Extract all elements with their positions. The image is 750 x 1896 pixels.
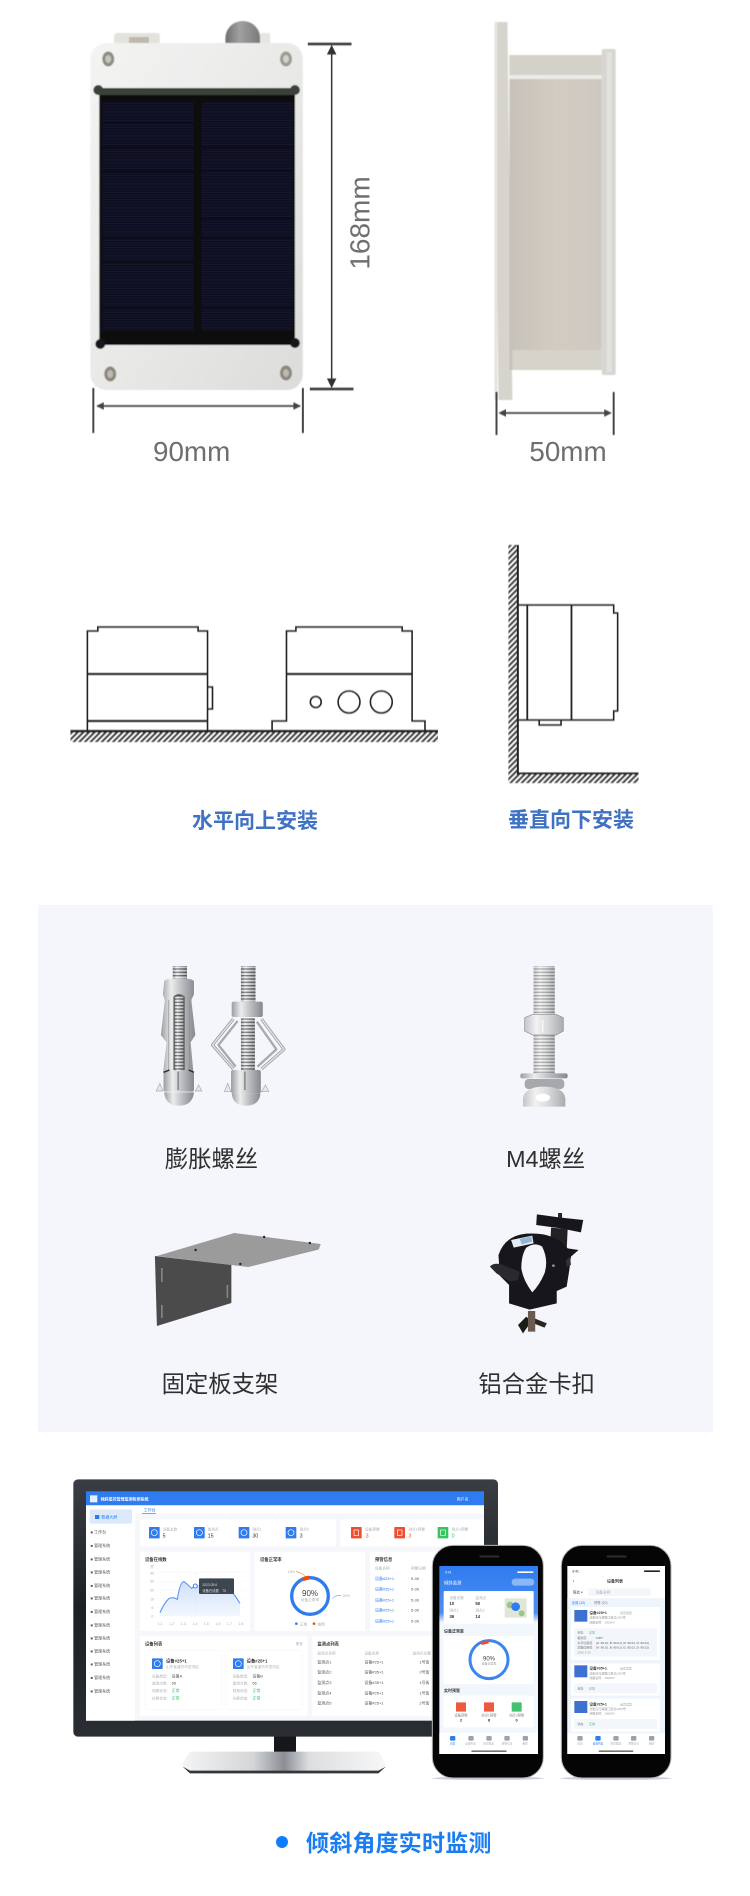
device list: 位移状态:: [233, 1695, 248, 1700]
device card 2: [571, 1663, 660, 1696]
stat card: 测点1: [449, 1608, 459, 1613]
stat strip: devices: 3: [300, 1534, 303, 1540]
tab bar: [567, 1733, 665, 1754]
dashboard sidebar: ■ 管理系统: [91, 1621, 110, 1627]
monitor screen: [86, 1492, 484, 1721]
tab bar: 我的: [649, 1742, 655, 1746]
height dimension arrow: [308, 44, 354, 389]
device card 2: 设备#35+1: [589, 1666, 607, 1671]
tab: [135, 1505, 484, 1514]
phone mockups: [432, 1545, 672, 1780]
donut chart: device normal rate: 90%: [343, 1594, 351, 1598]
desktop monitor dashboard mockup: [73, 1479, 498, 1773]
monitoring point list: 设备#35+1: [364, 1669, 384, 1675]
stat card: [444, 1591, 534, 1624]
dashboard sidebar: ■ 管理系统: [91, 1687, 110, 1693]
line chart: devices online: 1.4: [192, 1622, 197, 1626]
donut chart: device normal rate: 设备正常率: [301, 1597, 319, 1602]
donut chart: device normal rate: [255, 1552, 365, 1631]
stat strip: alarms: 测点1预警: [408, 1527, 425, 1532]
label: expansion bolts: 膨胀螺丝: [165, 1146, 258, 1172]
monitoring point list: 2号街: [419, 1669, 430, 1675]
dashboard sidebar: ■ 管理系统: [91, 1661, 110, 1667]
width label: 90mm: [153, 436, 230, 467]
alarm card: [444, 1696, 534, 1727]
line chart: devices online: 10: [150, 1597, 154, 1601]
device card 1: (A: 90.01, B: 90.01) (C: 90.01, D: 90.01): [596, 1641, 649, 1645]
alarm info list: 设备#25+1: [375, 1596, 395, 1602]
line chart: devices online: 30: [150, 1580, 154, 1584]
phone 2 screen: 9:41: [572, 1570, 579, 1574]
phone 1 screen: 9:41: [445, 1570, 452, 1574]
device card 1: 运营类型: [620, 1610, 632, 1615]
device card 3: 运营类型: [620, 1701, 632, 1706]
stat strip: alarms: 3: [408, 1534, 411, 1540]
device card 2: 正常: [589, 1685, 595, 1690]
stat card: 36: [449, 1614, 455, 1619]
device card 1: 高程位移值:: [577, 1645, 593, 1650]
monitoring point list: 设备#25+1: [364, 1700, 384, 1706]
width dimension arrow: [93, 388, 303, 433]
device list: 设备B: [252, 1672, 263, 1678]
device card 1: 相对值:: [577, 1635, 587, 1640]
tab bar: 首页: [577, 1742, 583, 1746]
line chart: devices online: [140, 1552, 250, 1631]
dashboard sidebar: ■ 管理系统: [91, 1582, 110, 1588]
dashboard header: [86, 1492, 484, 1505]
device list: 设备#25+1: [247, 1657, 268, 1664]
device card 3: 滨和任元湖路口西北1203号: [589, 1706, 626, 1711]
monitor bezel: [73, 1479, 498, 1737]
monitoring point list: 1号街: [419, 1658, 430, 1664]
device list: 正常: [252, 1694, 260, 1700]
monitoring point list: [312, 1636, 484, 1716]
stat card: 10: [449, 1601, 455, 1606]
icon: aluminum alloy clamp: [490, 1213, 583, 1333]
stat strip: alarms: 3: [366, 1534, 369, 1540]
donut card: 设备正常率: [482, 1661, 496, 1666]
device list: 正常: [252, 1687, 260, 1693]
device card 2: 运营类型: [620, 1666, 632, 1671]
alarm info list: 设备#25+1: [375, 1607, 395, 1613]
dashboard sidebar: ■ 管理系统: [91, 1674, 110, 1680]
alarm card: 测点1预警: [481, 1712, 497, 1717]
phone 2 screen: 设备名称: [596, 1590, 611, 1595]
alarm card: 2: [460, 1718, 463, 1723]
line chart: devices online: 1.8: [238, 1622, 243, 1626]
dashboard sidebar: ■ 管理系统: [91, 1555, 110, 1561]
tab bar: 首页: [450, 1742, 456, 1746]
donut chart: device normal rate: 90%: [302, 1589, 318, 1598]
stat strip: alarms: 测点1预警: [452, 1527, 469, 1532]
device card 1: 2020.5.30: [577, 1651, 591, 1655]
alarm info list: 5-30: [411, 1587, 420, 1592]
dashboard sidebar: ■ 管理系统: [91, 1608, 110, 1614]
tab bar: [439, 1733, 538, 1754]
device card 1: (A: 90.01, B: 90.01) (C: 95.01, D: 95.01): [596, 1646, 649, 1650]
device card 1: 线路名称：1000KV: [589, 1619, 615, 1624]
product front view with dimensions: [90, 21, 375, 467]
device card 3: 正常: [589, 1721, 595, 1726]
label: horizontal installation: 水平向上安装: [192, 810, 318, 833]
line chart: devices online: 设备在线数: [145, 1556, 167, 1563]
stat strip: devices: [140, 1519, 336, 1547]
dashboard sidebar: ■ 管理系统: [91, 1595, 110, 1601]
alarm card: 设备预警: [454, 1712, 468, 1717]
alarm card: 测点2预警: [509, 1712, 525, 1717]
device list: 设备列表: [145, 1640, 163, 1647]
opened anchor: [212, 966, 284, 1106]
alarm info list: [370, 1552, 484, 1631]
box: end elevation with cable ports: [272, 627, 425, 731]
device list: 倾角状态:: [233, 1688, 248, 1693]
device card 1: 水平位移值:: [577, 1640, 593, 1645]
device list: 位移状态:: [152, 1695, 168, 1700]
donut chart: device normal rate: 设备正常率: [260, 1556, 282, 1563]
depth label: 50mm: [529, 436, 607, 467]
wall and floor: [508, 545, 638, 783]
phone 1 screen: [439, 1566, 538, 1754]
stat strip: alarms: 0: [452, 1534, 455, 1540]
monitoring point list: 设备#25+1: [364, 1658, 384, 1664]
stat card: 14: [475, 1614, 481, 1619]
device photo: side: [495, 22, 616, 400]
monitor stand: [182, 1735, 387, 1773]
stat card: 监测点: [475, 1595, 487, 1600]
monitoring point list: 设备名称: [364, 1650, 379, 1655]
label: fixing plate bracket: 固定板支架: [162, 1371, 278, 1397]
tab bar: 我的: [522, 1742, 528, 1746]
donut chart: device normal rate: 故障: [318, 1621, 325, 1626]
device card 1: [571, 1607, 660, 1660]
device list: 山东省潍坊市坚河区: [166, 1664, 199, 1669]
label: vertical installation: 垂直向下安装: [508, 809, 634, 832]
device list: 监测点数:: [152, 1681, 168, 1686]
device list: 66: [172, 1681, 177, 1686]
device list: 监测点数:: [233, 1681, 248, 1686]
alarm info list: 5-30: [411, 1576, 420, 1581]
device card 3: 线路名称：1000KV: [589, 1711, 615, 1716]
stat card: 设备总数: [449, 1595, 464, 1600]
label: aluminum alloy clamp: 铝合金卡扣: [478, 1371, 595, 1397]
tab bar: 设备列表: [465, 1742, 476, 1746]
tab: 工作台: [144, 1507, 156, 1513]
device list: 设备#25+1: [166, 1657, 187, 1664]
line chart: devices online: 5: [151, 1606, 153, 1610]
alarm info list: 预警日期: [411, 1566, 426, 1571]
line chart: devices online: 20: [150, 1588, 154, 1592]
phone 2 screen: ‹: [573, 1579, 575, 1584]
donut card: 90%: [483, 1657, 496, 1663]
alarm info list: 5-30: [411, 1608, 420, 1613]
device list: [140, 1636, 307, 1716]
icon: M4 screw: [520, 966, 568, 1107]
device card 1: 0.85°: [596, 1636, 604, 1640]
monitoring point list: 监测点位置: [413, 1650, 431, 1655]
alarm info list: 设备#25+1: [375, 1575, 395, 1581]
phone 2 screen: 全部 (20): [572, 1600, 585, 1605]
icon: fixing plate bracket: [155, 1233, 321, 1326]
device card 3: [571, 1698, 660, 1732]
alarm card: 8: [488, 1718, 491, 1723]
horizontal installation diagram: [71, 627, 438, 742]
device card 2: 状态:: [577, 1685, 584, 1690]
phone 1 screen: 实时预警: [444, 1687, 460, 1693]
line chart: devices online: 2023.05.6: [202, 1583, 217, 1587]
line chart: devices online: 设备在线数 75: [202, 1588, 226, 1593]
box: side elevation: [87, 627, 213, 731]
phone 1 screen: 倾斜监测: [444, 1579, 462, 1586]
device card 1: 正常: [589, 1630, 595, 1635]
dashboard sidebar: ■ 管理系统: [91, 1542, 110, 1548]
stat strip: devices: 30: [252, 1534, 258, 1540]
stat strip: alarms: [341, 1519, 484, 1547]
stat strip: devices: 测点2: [300, 1527, 309, 1532]
dashboard sidebar: ■ 管理系统: [91, 1634, 110, 1640]
dashboard sidebar: ■ 管理系统: [91, 1569, 110, 1575]
tab bar: 历史报表: [611, 1742, 622, 1746]
line chart: devices online: 1.5: [204, 1622, 209, 1626]
line chart: devices online: 开: [150, 1565, 154, 1569]
phone 1 screen: 设备正常率: [444, 1627, 464, 1633]
device card 3: 状态:: [577, 1721, 584, 1726]
stat card: 测点2: [475, 1608, 485, 1613]
monitoring point list: 监测点名称: [317, 1650, 336, 1655]
phone 2 screen: 预警 (20): [594, 1600, 607, 1605]
line chart: devices online: 1.2: [169, 1622, 174, 1626]
device list: 设备A: [172, 1672, 183, 1678]
monitoring point list: 设备#35+1: [364, 1679, 384, 1685]
monitoring point list: 1号街: [419, 1689, 430, 1695]
ground: [71, 730, 438, 742]
tab bar: 设备列表: [593, 1742, 604, 1746]
device card 3: 设备#25+1: [589, 1701, 607, 1706]
monitoring point list: 监测点2: [317, 1669, 332, 1675]
device list: 更多: [296, 1641, 303, 1646]
monitoring point list: 2号街: [419, 1700, 430, 1706]
phone 2 screen: 设备列表: [607, 1578, 623, 1584]
closed anchor: [156, 966, 202, 1106]
stat strip: devices: 监测点: [208, 1527, 219, 1532]
line chart: devices online: 1.1: [158, 1622, 163, 1626]
monitoring point list: 设备#25+1: [364, 1689, 384, 1695]
dashboard sidebar: [86, 1505, 135, 1721]
label: M4 screw: M4螺丝: [506, 1146, 585, 1172]
alarm info list: 设备名称: [375, 1566, 390, 1571]
product side view with dimensions: [495, 22, 616, 467]
phone 1: monitoring home: [432, 1545, 544, 1780]
alarm info list: 设备#35+1: [375, 1586, 395, 1592]
dashboard sidebar: ■ 管理系统: [91, 1648, 110, 1654]
monitoring point list: 监测点5: [317, 1700, 332, 1706]
device card 1: 设备#25+1: [589, 1610, 607, 1615]
wall mounted box: [518, 605, 618, 725]
device list: 倾角状态:: [152, 1688, 168, 1693]
donut card: [444, 1636, 534, 1684]
alarm info list: 预警信息: [375, 1556, 393, 1563]
line chart: devices online: 0: [151, 1615, 153, 1619]
stat card: 50: [475, 1601, 481, 1606]
icon: expansion bolts: [156, 966, 284, 1106]
dashboard sidebar: 数据大屏: [101, 1513, 117, 1519]
device list: 正常: [172, 1687, 180, 1693]
alarm card: 0: [516, 1718, 519, 1723]
device card 1: 滨和任元湖路口西北1203号: [589, 1615, 626, 1620]
device list: 设备类型:: [233, 1673, 248, 1678]
panel: mounting accessories: [38, 905, 713, 1432]
line chart: devices online: 1.7: [227, 1622, 232, 1626]
dashboard sidebar: ■ 工作台: [91, 1529, 106, 1535]
phone 2 screen: 筛选 ▾: [573, 1590, 583, 1595]
device card 1: 状态:: [577, 1630, 584, 1635]
device list: 66: [252, 1681, 258, 1686]
caption: tilt angle real-time monitoring: 倾斜角度实时监测: [306, 1830, 492, 1856]
height label: 168mm: [344, 176, 375, 270]
device list: 正常: [172, 1694, 180, 1700]
stat strip: devices: 15: [208, 1534, 214, 1540]
stat strip: alarms: 设备预警: [365, 1527, 380, 1532]
tab bar: 预警信息: [502, 1742, 513, 1746]
tab bar: 预警信息: [628, 1742, 639, 1746]
stat strip: devices: 设备总数: [163, 1527, 178, 1532]
line chart: devices online: 1.6: [215, 1622, 220, 1626]
alarm info list: 设备#25+1: [375, 1617, 395, 1623]
depth dimension arrow: [496, 392, 614, 435]
line chart: devices online: 1.3: [181, 1622, 186, 1626]
phone 2 screen: [567, 1566, 665, 1754]
donut chart: device normal rate: 正常: [300, 1621, 308, 1626]
line chart: devices online: 40: [150, 1571, 154, 1575]
device photo: front with solar panel: [90, 21, 303, 390]
phone 2: device list: [560, 1545, 672, 1780]
tab bar: 历史报表: [483, 1742, 494, 1746]
alarm info list: 5-30: [411, 1597, 420, 1602]
monitoring point list: 监测点列表: [317, 1640, 340, 1647]
stat strip: devices: 5: [163, 1534, 166, 1540]
stat strip: devices: 测点1: [252, 1527, 262, 1532]
vertical installation diagram: [508, 545, 638, 783]
device card 2: 线路名称：1000KV: [589, 1675, 615, 1680]
dashboard header: 倾斜监控管理监测检测系统: [101, 1496, 148, 1502]
device list: 山东省潍坊市坚河区: [247, 1664, 280, 1669]
device list: 设备类型:: [152, 1673, 168, 1678]
monitoring point list: 监测点1: [317, 1658, 332, 1664]
monitoring point list: 监测点4: [317, 1689, 332, 1695]
dashboard header: 用户名: [457, 1496, 469, 1502]
caption bullet: [276, 1836, 288, 1848]
donut chart: device normal rate: 16%: [288, 1570, 296, 1574]
monitoring point list: 1号街: [419, 1679, 430, 1685]
monitoring point list: 监测点3: [317, 1679, 332, 1685]
alarm info list: 5-30: [411, 1618, 420, 1623]
device card 2: 滨和任元湖路口西北1203号: [589, 1670, 626, 1675]
